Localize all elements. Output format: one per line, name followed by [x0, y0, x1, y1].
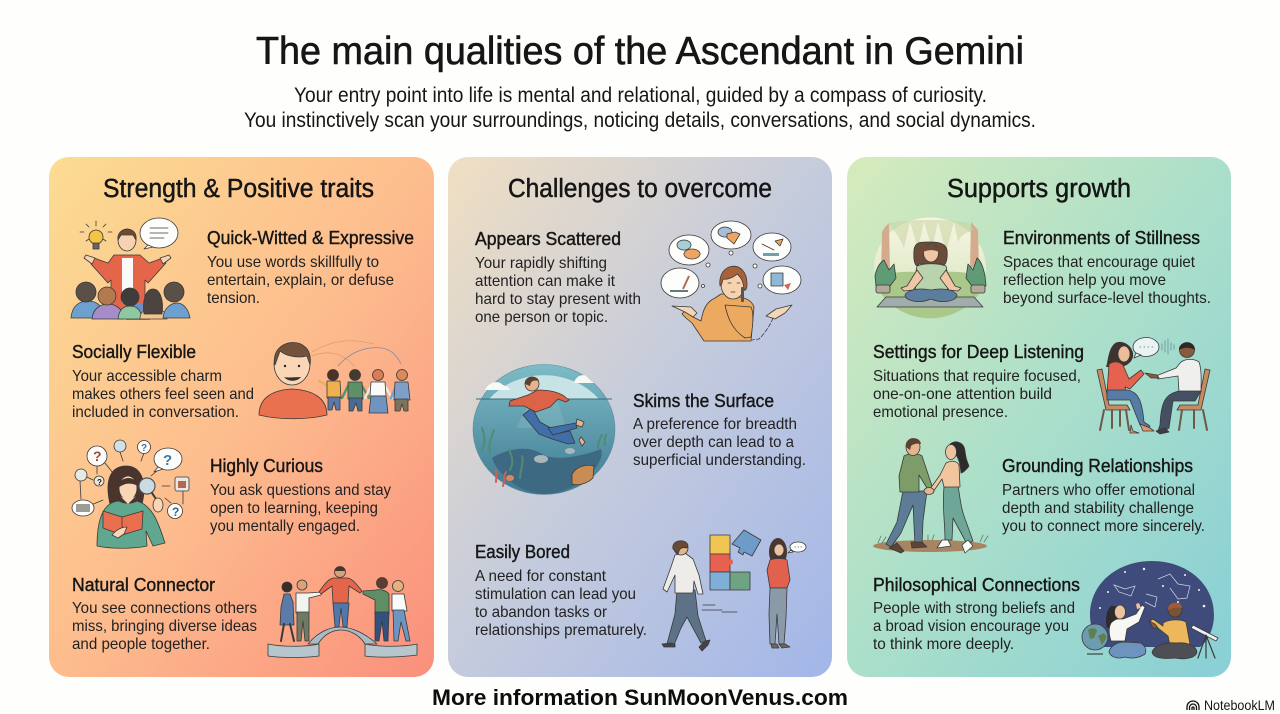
item body: reflection help you move	[1003, 272, 1166, 289]
icon: distracted person with thought bubbles	[661, 221, 801, 341]
item body	[1003, 254, 1211, 307]
item body: and people together.	[72, 636, 210, 653]
item body: relationships prematurely.	[475, 622, 647, 639]
item heading: Skims the Surface	[633, 391, 774, 411]
item body: attention can make it	[475, 273, 616, 290]
item body: A need for constant	[475, 568, 607, 585]
icon: woman surrounded by questions	[72, 440, 189, 548]
item: environments of stillness	[874, 218, 1211, 318]
panel: strength and positive traits	[49, 157, 434, 677]
icon: stargazing with globe and telescope	[1082, 561, 1218, 659]
item body: Partners who offer emotional	[1002, 482, 1195, 499]
item body: Your rapidly shifting	[475, 255, 607, 272]
item heading: Quick-Witted & Expressive	[207, 228, 414, 248]
icon: woman surrounded by questions: ?	[163, 452, 172, 469]
item body: to abandon tasks or	[475, 604, 608, 621]
item body: you mentally engaged.	[210, 518, 360, 535]
item body: A preference for breadth	[633, 416, 797, 433]
item heading: Environments of Stillness	[1003, 228, 1200, 248]
item body: depth and stability challenge	[1002, 500, 1194, 517]
item heading: Highly Curious	[210, 456, 323, 476]
item body: emotional presence.	[873, 404, 1008, 421]
item body: over depth can lead to a	[633, 434, 794, 451]
panel heading: growth: Supports growth	[947, 175, 1131, 203]
item body: open to learning, keeping	[210, 500, 378, 517]
icon: two people in conversation	[1097, 338, 1210, 434]
item body: You ask questions and stay	[210, 482, 391, 499]
icon: woman surrounded by questions: ?	[93, 448, 102, 464]
item body: you to connect more sincerely.	[1002, 518, 1205, 535]
item body	[210, 482, 391, 535]
item heading: Easily Bored	[475, 542, 570, 562]
item heading: Grounding Relationships	[1002, 456, 1193, 476]
item: skims the surface	[473, 364, 806, 494]
subtitle: Your entry point into life is mental and relational, guided by a compass of curiosity.	[294, 83, 987, 107]
subtitle	[244, 83, 1036, 132]
item heading: Philosophical Connections	[873, 575, 1080, 595]
item body: entertain, explain, or defuse	[207, 272, 394, 289]
item body: one-on-one attention build	[873, 386, 1052, 403]
item body: to think more deeply.	[873, 636, 1014, 653]
item body	[1002, 482, 1205, 535]
item: philosophical connections	[873, 561, 1218, 659]
item heading: Appears Scattered	[475, 229, 621, 249]
subtitle: You instinctively scan your surroundings, noticing details, conversations, and social dynamics.	[244, 108, 1036, 132]
item: natural connector	[72, 566, 417, 658]
icon: speaker with audience	[71, 218, 190, 320]
item body: a broad vision encourage you	[873, 618, 1069, 635]
item heading: Settings for Deep Listening	[873, 342, 1084, 362]
item: highly curious	[72, 440, 391, 548]
item body: hard to stay present with	[475, 291, 641, 308]
icon: couple holding hands	[873, 438, 988, 553]
item body	[207, 254, 394, 307]
item body: superficial understanding.	[633, 452, 806, 469]
icon: people meeting on a bridge	[268, 566, 417, 658]
panel: supports growth	[847, 157, 1231, 677]
item body	[475, 568, 647, 639]
item body: Spaces that encourage quiet	[1003, 254, 1196, 271]
item body: You use words skillfully to	[207, 254, 379, 271]
icon: woman surrounded by questions: ?	[97, 478, 102, 487]
item body: Your accessible charm	[72, 368, 222, 385]
item: grounding relationships	[873, 438, 1205, 553]
item body: makes others feel seen and	[72, 386, 254, 403]
item: easily bored	[475, 530, 806, 651]
item body: included in conversation.	[72, 404, 239, 421]
item body: stimulation can lead you	[475, 586, 636, 603]
item: socially flexible	[72, 341, 410, 421]
item body	[475, 255, 641, 326]
item body: You see connections others	[72, 600, 257, 617]
item: quick-witted and expressive	[71, 218, 414, 320]
item body	[873, 368, 1081, 421]
title: The main qualities of the Ascendant in Gemini	[256, 30, 1024, 73]
item body: one person or topic.	[475, 309, 608, 326]
footer link: More information SunMoonVenus.com	[432, 685, 848, 710]
item body: beyond surface-level thoughts.	[1003, 290, 1211, 307]
icon: man connected to friends	[259, 341, 410, 419]
panel heading: strengths: Strength & Positive traits	[103, 175, 374, 203]
icon: NotebookLM logo	[1187, 701, 1199, 710]
item body: People with strong beliefs and	[873, 600, 1075, 617]
item: appears scattered	[475, 221, 801, 341]
item body	[72, 368, 254, 421]
item: settings for deep listening	[873, 338, 1210, 434]
item heading: Socially Flexible	[72, 342, 196, 362]
item body	[873, 600, 1075, 653]
item body: Situations that require focused,	[873, 368, 1081, 385]
item body	[633, 416, 806, 469]
icon: meditating in a forest	[874, 218, 986, 318]
item body: tension.	[207, 290, 260, 307]
icon: walking away from a puzzle	[662, 530, 806, 651]
item heading: Natural Connector	[72, 575, 215, 595]
icon: swimmer at the surface	[473, 364, 615, 494]
icon: woman surrounded by questions: ?	[141, 443, 147, 454]
panel: challenges to overcome	[448, 157, 832, 677]
panel heading: challenges: Challenges to overcome	[508, 175, 772, 203]
item body: miss, bringing diverse ideas	[72, 618, 257, 635]
icon: woman surrounded by questions: ?	[172, 505, 179, 519]
item body	[72, 600, 257, 653]
